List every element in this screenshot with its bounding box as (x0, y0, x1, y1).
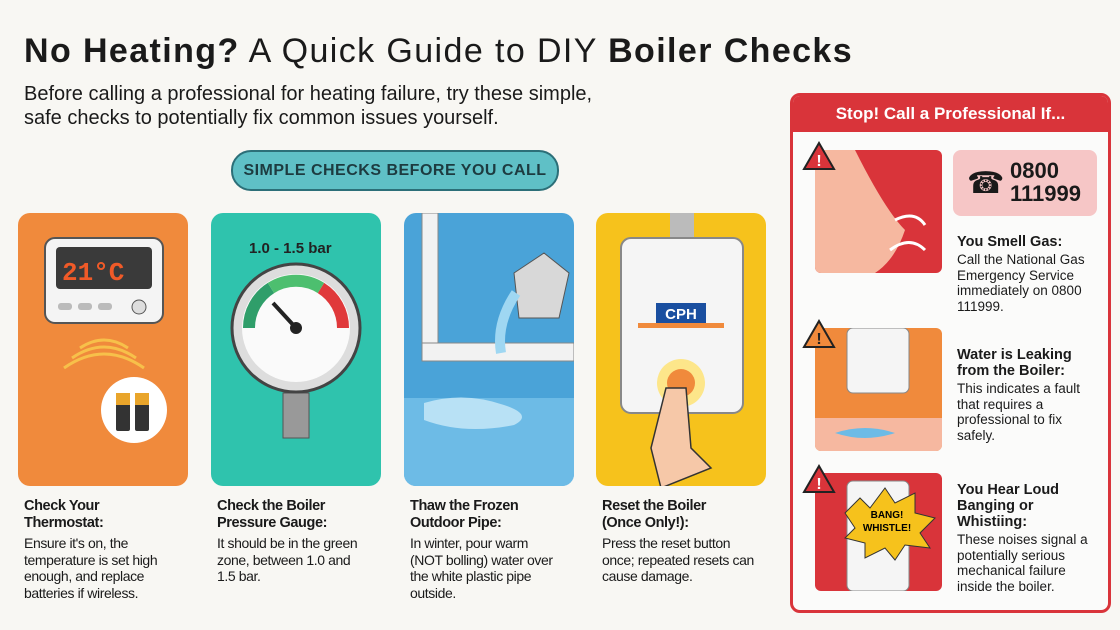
card text: reset: Reset the Boiler (602, 498, 706, 514)
icon: warning 3: ! (816, 476, 822, 493)
card text: thermostat: Ensure it's on, the temperature is set high enough, and replace batteries if wireless. (24, 535, 157, 600)
icon: warning 2: ! (816, 331, 822, 348)
text: banging: You Hear Loud Banging or Whistiing: (957, 482, 1059, 530)
text: smell gas: Call the National Gas Emergency Service immediately on 0800 111999. (957, 252, 1085, 314)
image: leaking (815, 328, 942, 451)
card text: pipe: In winter, pour warm (NOT bolling) water over the white plastic pipe outside. (410, 535, 553, 600)
title: No Heating? A Quick Guide to DIY Boiler Checks (24, 32, 853, 70)
card text: pipe: Thaw the Frozen Outdoor Pipe: (410, 498, 518, 531)
card: reset (596, 213, 766, 486)
panel header: Stop! Call a Professional If... (836, 104, 1065, 123)
phone bubble: 111999 (1010, 181, 1081, 206)
card: thermostat (18, 213, 188, 486)
section pill (231, 150, 559, 191)
panel header (793, 96, 1108, 132)
text: leaking: This indicates a fault that requires a professional to fix safely. (957, 381, 1080, 442)
card text: reset: (Once Only!): (602, 515, 689, 531)
card: thermostat: 21°C (62, 258, 124, 288)
image: banging: WHISTLE! (863, 523, 911, 534)
phone bubble: ☎ (967, 167, 1004, 200)
card text: thermostat: Check Your Thermostat: (24, 498, 103, 531)
image: smell gas (815, 150, 942, 273)
text: smell gas: You Smell Gas: (957, 234, 1062, 250)
text: leaking: Water is Leaking from the Boiler: (957, 347, 1072, 379)
icon: warning 3 (802, 464, 836, 493)
card text: reset (602, 498, 754, 584)
card text: gauge: Check the Boiler Pressure Gauge: (217, 498, 327, 531)
card text: gauge (217, 498, 357, 584)
card text: pipe (410, 498, 553, 600)
card text: thermostat (24, 498, 157, 600)
image: banging: BANG! (871, 510, 903, 521)
card: pressure gauge (211, 213, 381, 486)
image: banging (815, 473, 942, 591)
panel: call a professional (790, 93, 1111, 613)
text: banging (957, 482, 1088, 594)
icon: warning 1: ! (816, 153, 822, 170)
phone bubble (953, 150, 1097, 216)
subtitle: Before calling a professional for heating failure, try these simple, safe checks to potentially fix common issues yourself. (24, 83, 592, 129)
card: reset: CPH (665, 306, 697, 323)
card: pressure gauge: 1.0 - 1.5 bar (249, 240, 332, 257)
text: leaking (957, 347, 1080, 443)
card text: gauge: It should be in the green zone, between 1.0 and 1.5 bar. (217, 535, 357, 584)
card text: reset: Press the reset button once; repeated resets can cause damage. (602, 535, 754, 584)
icon: warning 2 (802, 319, 836, 348)
card: frozen pipe (404, 213, 574, 486)
icon: warning 1 (802, 141, 836, 170)
text: banging: These noises signal a potentially serious mechanical failure inside the boiler. (957, 532, 1088, 594)
phone bubble: 0800 (1010, 158, 1059, 183)
section pill: SIMPLE CHECKS BEFORE YOU CALL (243, 162, 547, 179)
